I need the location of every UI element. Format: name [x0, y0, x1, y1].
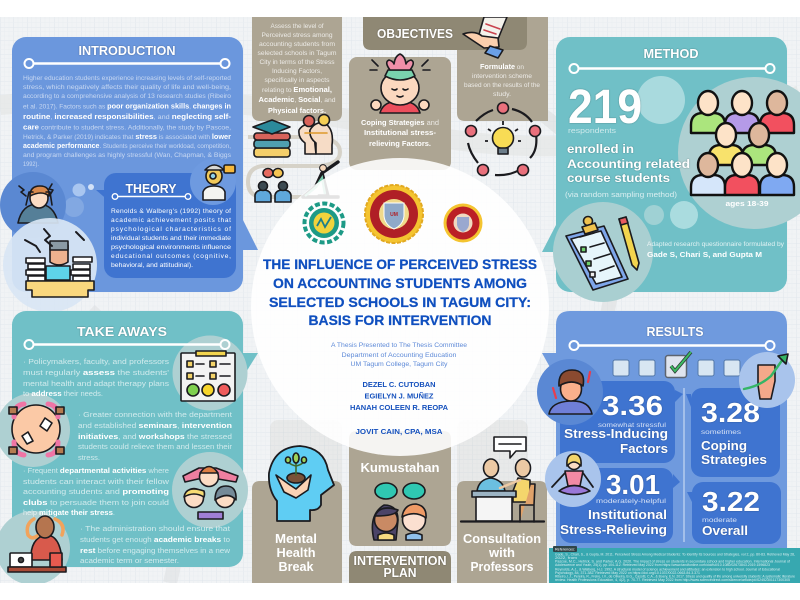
text: takeaway 2: students could relieve them and lessen their [78, 444, 233, 451]
card: stress-inducing factors: somewhat stressful [598, 422, 667, 429]
panel: results [537, 311, 795, 549]
text: takeaway 4: academic term or semester. [80, 558, 179, 565]
panel: mental health break: Mental [275, 532, 317, 546]
text: authors: HANAH COLEEN R. REOPA [350, 403, 449, 412]
panel: references: Pascoe, M.C., Hetrick, S. and Parker, A.G. 2020. The impact of stress on students in secondary school and higher education. International Journal of [555, 560, 790, 564]
icon: hands on head [18, 184, 58, 223]
panel: objective assess: Assess the level of [270, 23, 324, 30]
text: takeaway 4 [80, 526, 231, 565]
text: takeaway 3 [23, 466, 170, 517]
text: enrolled [565, 144, 690, 199]
panel: references: References: [555, 548, 575, 552]
icon: two heads [299, 114, 332, 154]
panel: consultation with professors: Consultation [463, 532, 541, 546]
panel: objective assess: Inducing Factors, [272, 68, 322, 75]
panel: objective formulate: based on the results of the [464, 82, 540, 89]
text: takeaway 1: must regularly assess the students' [23, 368, 169, 377]
text: theory body [111, 208, 231, 269]
heading: take aways: TAKE AWAYS [77, 324, 167, 339]
icon: professor [203, 165, 235, 200]
panel: references: Ribeiro, I.J., Pereira, R., Freire, I.V., de Oliveira, B.G., Casotti, C.A., & Boery, E.N. 2017. Stress and quality of life among university students: A systematic literature [555, 574, 795, 578]
card: coping strategies: Strategies [701, 452, 767, 467]
stat: 219 respondents: 219 [568, 81, 642, 134]
heading: objectives [363, 17, 527, 50]
panel: objective coping: Institutional stress- [364, 128, 437, 137]
text: takeaway 1: · Policymakers, faculty, and professors [23, 359, 170, 366]
text: introduction body: 1992). [23, 161, 39, 168]
text: takeaway 1: to address their needs. [23, 389, 103, 398]
panel: mental health break [252, 481, 342, 583]
text: theory body: psychological environments influence [111, 244, 231, 251]
card: institutional stress-relieving: Stress-Relieving [560, 522, 667, 537]
title [263, 257, 537, 328]
panel: references: review. Health Professions Education, 4, 4(2), p. 70-77. Retrieved May 2022 from http://www.sciencedirect.com/science/article/pii/S2452301117300305 [555, 578, 790, 582]
text: theory body: educational outcomes (cognitive, [111, 253, 231, 260]
text: introduction body: stress, which negatively affects their quality of life and well-being, [23, 84, 231, 91]
text: thesis details: Department of Accounting Education [342, 353, 456, 359]
icon: three student faces [183, 466, 238, 519]
title: BASIS FOR INTERVENTION [308, 313, 492, 328]
panel: consultation with professors [457, 481, 547, 583]
card: stress-inducing factors [560, 381, 683, 463]
text: takeaway 1 [23, 359, 170, 398]
icon: fist with rising arrow [739, 352, 795, 408]
panel: intervention plan [349, 551, 451, 583]
stat: 219 respondents: respondents [568, 128, 617, 135]
icon circle: stressed student [0, 172, 66, 238]
text: authors: EGIELYN J. MUÑEZ [364, 392, 434, 400]
text: theory body: behavioral, and attitudinal). [111, 262, 193, 269]
panel: references [549, 546, 800, 583]
card: coping strategies: 3.28 [701, 397, 760, 428]
panel: objective assess: relating to Emotional, [262, 85, 332, 94]
heading: introduction: INTRODUCTION [78, 43, 176, 58]
text: introduction body: and program challenges as highly stressful (Wan, Chapman, & Biggs [23, 152, 232, 159]
text: enrolled: Accounting related [567, 159, 690, 171]
card: overall [687, 482, 781, 544]
panel: objective assess [252, 17, 342, 121]
text: introduction body: academic performance. Students perceive their workload, competition, [23, 141, 231, 150]
icon: two kids with chat bubbles [372, 483, 426, 540]
text: thesis details: UM Tagum College, Tagum City [350, 362, 448, 368]
text: introduction body [23, 75, 232, 168]
card: institutional stress-relieving: moderately-helpful [596, 498, 667, 505]
panel: mental health break: Health [276, 546, 316, 560]
text: introduction body: et al. 2017). Factors such as poor organization skills, changes in [23, 102, 231, 110]
icon: lightbulb cycle [466, 102, 540, 176]
icon: student behind books [25, 229, 94, 297]
card: institutional stress-relieving [560, 468, 680, 543]
icon: books and graduation cap [253, 120, 290, 157]
panel: intervention plan: PLAN [384, 565, 416, 580]
icon: clipboard and hand [463, 17, 507, 58]
icon: clipboard and pencil [566, 216, 639, 290]
text: takeaway 4: rest before engaging themselves in a new [80, 546, 231, 555]
icon: meditating woman [545, 451, 601, 507]
icon: stressed person [537, 359, 603, 425]
text: questionnaire: Gade S, Chari S, and Gupta M [647, 250, 762, 259]
title: THE INFLUENCE OF PERCEIVED STRESS [263, 257, 537, 272]
text: adviser: JOVIT CAIN, CPA, MSA [356, 427, 443, 436]
card: overall: Overall [702, 523, 748, 538]
text: questionnaire: Adapted research questionnaire formulated by [647, 242, 784, 248]
heading: method: METHOD [644, 46, 698, 61]
text: takeaway 4: students get enough academic breaks to [80, 535, 230, 544]
text: takeaway 3: help mitigate their stress . [23, 508, 115, 517]
panel: objective formulate: Formulate on [480, 62, 524, 71]
icon: tired student at laptop [8, 516, 66, 572]
text: introduction body: Hetrick, & Parker (2019) indicates that stress is associated with lower [23, 132, 231, 141]
central circle with title [251, 158, 549, 456]
panel: references: Adolescence and Youth, 25(1), pp.104-112. Retrieved May 2022 from https://www.tandfonline.com/doi/full/10.1080/02673843.2019.1596823 [555, 563, 770, 567]
icon: consultation at desk [461, 437, 544, 522]
text: takeaway 3: · Frequent departmental activities where [23, 466, 169, 475]
card: overall: 3.22 [702, 486, 760, 517]
panel: kumustahan [349, 431, 451, 546]
title: ON ACCOUNTING STUDENTS AMONG [273, 276, 527, 291]
icon: two people talking [255, 168, 291, 202]
panel: references: Reynolds, A.J., & Walberg, H.J. 1992. A structural model of science achievement and attitudes: an extension to high school. Journal of Educational [555, 568, 780, 572]
icon circle: overwhelmed student [3, 218, 97, 312]
card: stress-inducing factors: 3.36 [602, 390, 663, 421]
text: takeaway 4: · The administration should ensure that [80, 526, 230, 533]
card: stress-inducing factors: Factors [620, 441, 668, 456]
card: institutional stress-relieving: 3.01 [606, 469, 660, 500]
text: enrolled: course students [567, 173, 670, 185]
panel: references: 2022, from [555, 556, 577, 560]
icon: meditating head with lotus [370, 54, 430, 113]
title: SELECTED SCHOOLS IN TAGUM CITY: [269, 295, 531, 310]
icon: mood checklist [181, 351, 235, 401]
text: takeaway 3: clubs to persuade them to join could [23, 498, 169, 507]
panel: objective assess: City in terms of the Stress [260, 59, 335, 66]
icon: group of students [691, 91, 794, 195]
panel: objective coping: Coping Strategies and [361, 118, 439, 127]
panel: consultation with professors: with [488, 546, 515, 560]
text: theory body: Renolds & Walberg's (1992) theory of [111, 208, 231, 215]
panel: objective assess: Perceived stress among [262, 32, 333, 39]
card: coping strategies [686, 388, 780, 477]
text: takeaway 2: · Greater connection with the department [78, 412, 232, 419]
logo: accounting society gear [304, 204, 344, 242]
panel: objective formulate: study. [493, 91, 511, 98]
card: overall: moderate [702, 517, 737, 524]
panel: introduction [12, 37, 258, 292]
text: ages: ages 18-39 [726, 201, 769, 208]
panel: objective coping: relieving Factors. [369, 139, 431, 148]
panel: intervention plan: INTERVENTION [354, 553, 446, 568]
text: takeaway 2: and established seminars , intervention [78, 421, 233, 430]
panel: objective formulate [457, 17, 548, 121]
text: authors [350, 380, 449, 412]
panel: take aways [0, 311, 258, 585]
icon: rating checkboxes [613, 352, 740, 378]
text: authors: DEZEL C. CUTOBAN [362, 380, 436, 389]
panel: theory [96, 159, 236, 278]
heading: results: RESULTS [646, 324, 704, 339]
panel: objective formulate: intervention scheme [472, 73, 532, 80]
text: takeaway 2: stress. [78, 455, 100, 462]
logo: university of mindanao: UM [390, 212, 398, 218]
text: theory body: academic achievement posits that [111, 217, 231, 224]
logo: university of mindanao [365, 185, 423, 243]
panel: references: Gade, S., Chari, S., & Gupta, M. 2011. Perceived Stress Among Medical Students: To Identify Its Sources and Strategies, vol 2, pp. 80-83. Retrieved May 28, [555, 552, 795, 556]
text: takeaway 2: initiatives , and workshops the stressed [78, 432, 232, 441]
icon: mental health head [269, 446, 334, 521]
card: coping strategies: Coping [701, 438, 747, 453]
panel: objective assess: selected schools in Tagum [258, 50, 337, 57]
text: introduction body: Higher education students experience increasing levels of self-reported [23, 75, 231, 82]
heading: theory: THEORY [126, 181, 177, 196]
text: theory body: psychological characteristics of [111, 226, 231, 233]
icon: yoga pose [303, 162, 338, 197]
text: introduction body: according to a comprehensive analysis of 13 research studies (Ribeiro [23, 93, 231, 100]
panel: objective assess: Physical factors. [268, 106, 326, 115]
text: takeaway 3: accounting students and promoting [23, 487, 170, 496]
text: questionnaire [647, 242, 784, 259]
text: takeaway 2 [78, 412, 233, 462]
heading: objectives: OBJECTIVES [377, 26, 453, 41]
icon: holding hands circle [9, 404, 64, 455]
panel: mental health break: Break [278, 560, 314, 574]
text: thesis details [331, 343, 468, 368]
logo: um tagum college [444, 204, 482, 242]
text: thesis details: A Thesis Presented to The Thesis Committee [331, 343, 468, 349]
text: introduction body: routine , increased responsibilities , and neglecting self- [23, 112, 232, 121]
text: enrolled: enrolled in [567, 144, 634, 156]
text: theory body: individual students and their immediate [111, 235, 231, 242]
card: coping strategies: sometimes [701, 429, 742, 436]
card: institutional stress-relieving: Institutional [588, 507, 667, 522]
decorative bubbles: theory [64, 184, 94, 217]
panel: references: Psychology, 84, 371-382. Retrieved May 2022 on https://doi.org/10.1037/0022-0663.84.3.371 [555, 571, 700, 575]
panel: objective assess: specifically in aspects [264, 77, 330, 84]
card: stress-inducing factors: Stress-Inducing [564, 426, 668, 441]
panel: kumustahan: Kumustahan [360, 461, 440, 475]
text: takeaway 3: students can interact with their fellow [23, 479, 170, 486]
panel: method [542, 37, 800, 302]
panel: consultation with professors: Professors [470, 560, 534, 574]
text: takeaway 1: mental health and adapt therapy plans [23, 381, 170, 388]
text: introduction body: care contribute to student stress. Additionally, the study by Pascoe, [23, 122, 231, 132]
panel: objective assess: accounting students from [259, 41, 336, 48]
panel: objective assess: Academic, Social, and [258, 95, 336, 104]
text: enrolled: (via random sampling method) [565, 192, 677, 199]
panel: objective coping [349, 57, 451, 170]
